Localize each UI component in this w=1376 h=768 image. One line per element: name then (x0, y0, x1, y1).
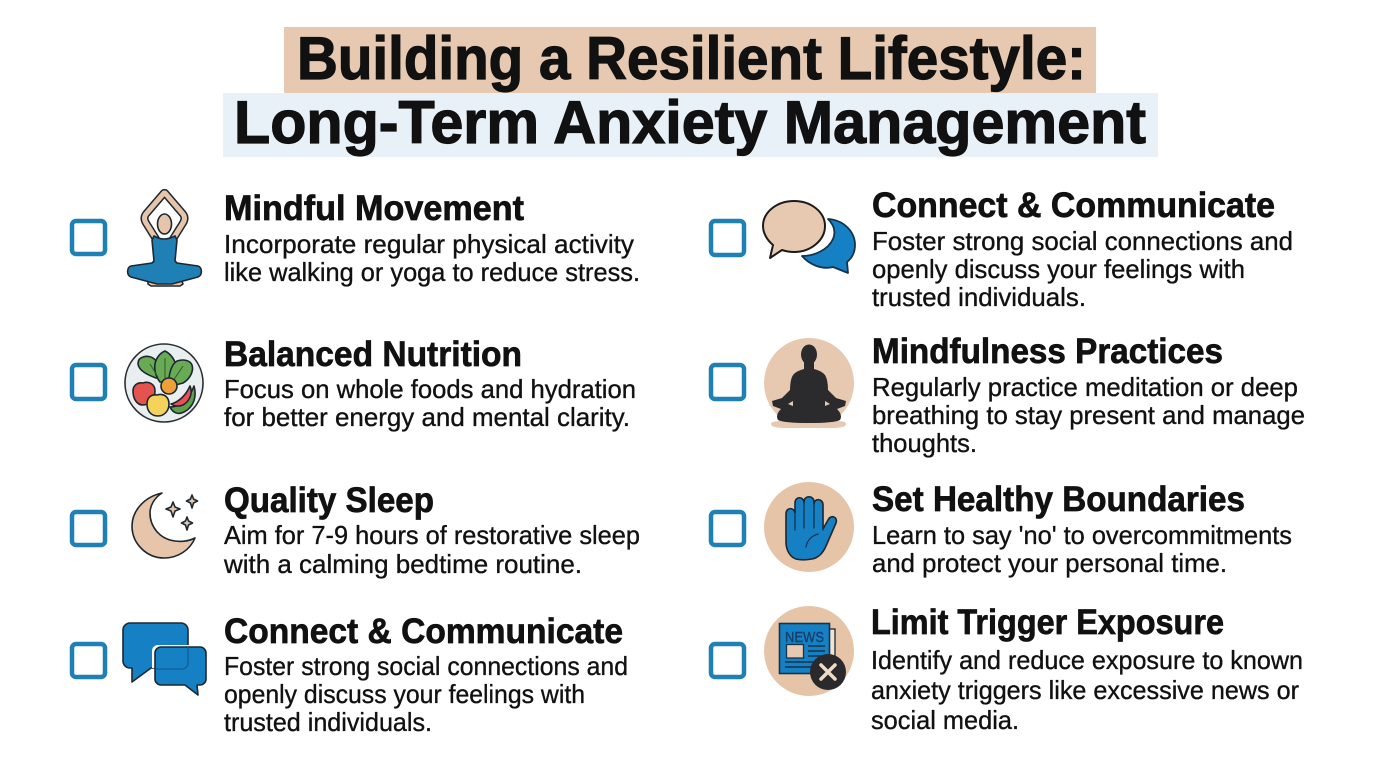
text: openly discuss your feelings with (872, 254, 1245, 284)
icon: newspaper with cross: NEWS (785, 629, 824, 646)
icon: square speech bubbles (123, 623, 206, 695)
checkbox (711, 221, 744, 255)
text: for better energy and mental clarity. (224, 402, 630, 432)
text: Aim for 7-9 hours of restorative sleep (224, 520, 640, 550)
text (872, 372, 1305, 458)
checkbox (711, 512, 744, 545)
heading: Mindfulness Practices (872, 332, 1223, 371)
text: Identify and reduce exposure to known (871, 645, 1303, 675)
text: thoughts. (872, 428, 977, 458)
heading: Connect & Communicate (224, 612, 623, 651)
heading: Set Healthy Boundaries (872, 480, 1245, 519)
heading: Connect & Communicate (872, 186, 1275, 225)
checkbox (711, 365, 744, 399)
item: Limit Trigger Exposure (711, 603, 1303, 735)
text (223, 520, 640, 579)
text: Foster strong social connections and (872, 226, 1293, 256)
checkbox (72, 221, 105, 254)
text: trusted individuals. (872, 282, 1086, 312)
checkbox (72, 365, 105, 399)
heading: Balanced Nutrition (224, 335, 522, 374)
text: with a calming bedtime routine. (223, 549, 582, 579)
icon: meditation silhouette (764, 338, 854, 428)
item: Balanced Nutrition (72, 335, 636, 432)
text (224, 374, 636, 432)
checkbox (72, 512, 105, 545)
text: trusted individuals. (224, 707, 432, 737)
checkbox (72, 644, 105, 677)
text: social media. (871, 705, 1019, 735)
title: Long-Term Anxiety Management (234, 89, 1146, 156)
text: Incorporate regular physical activity (224, 229, 634, 259)
text: Learn to say 'no' to overcommitments (872, 520, 1292, 550)
icon: round speech bubbles (763, 201, 855, 273)
text (224, 651, 628, 737)
text: Foster strong social connections and (224, 651, 628, 681)
item: Mindful Movement (72, 189, 640, 287)
item: Connect & Communicate (left) (72, 612, 628, 737)
text (871, 645, 1303, 735)
item: Quality Sleep (72, 481, 640, 579)
item: Connect & Communicate (right) (711, 186, 1293, 312)
icon: newspaper with cross (764, 606, 854, 696)
heading: Limit Trigger Exposure (871, 603, 1224, 642)
text (872, 520, 1292, 578)
text: openly discuss your feelings with (224, 679, 585, 709)
icon: yoga pose (128, 193, 201, 286)
icon: raised hand (764, 482, 854, 572)
heading: Quality Sleep (224, 481, 434, 520)
text (224, 229, 640, 287)
heading: Mindful Movement (224, 189, 524, 228)
title: Building a Resilient Lifestyle: (297, 25, 1086, 92)
text: anxiety triggers like excessive news or (871, 675, 1299, 705)
icon: plate of food (125, 344, 203, 422)
text: breathing to stay present and manage (872, 400, 1305, 430)
text: Focus on whole foods and hydration (224, 374, 636, 404)
checkbox (711, 644, 744, 677)
text (872, 226, 1293, 312)
item: Set Healthy Boundaries (711, 480, 1292, 578)
text: and protect your personal time. (872, 548, 1227, 578)
text: like walking or yoga to reduce stress. (224, 257, 640, 287)
item: Mindfulness Practices (711, 332, 1305, 458)
text: Regularly practice meditation or deep (872, 372, 1298, 402)
title (223, 25, 1158, 157)
icon: moon and stars (132, 493, 198, 558)
